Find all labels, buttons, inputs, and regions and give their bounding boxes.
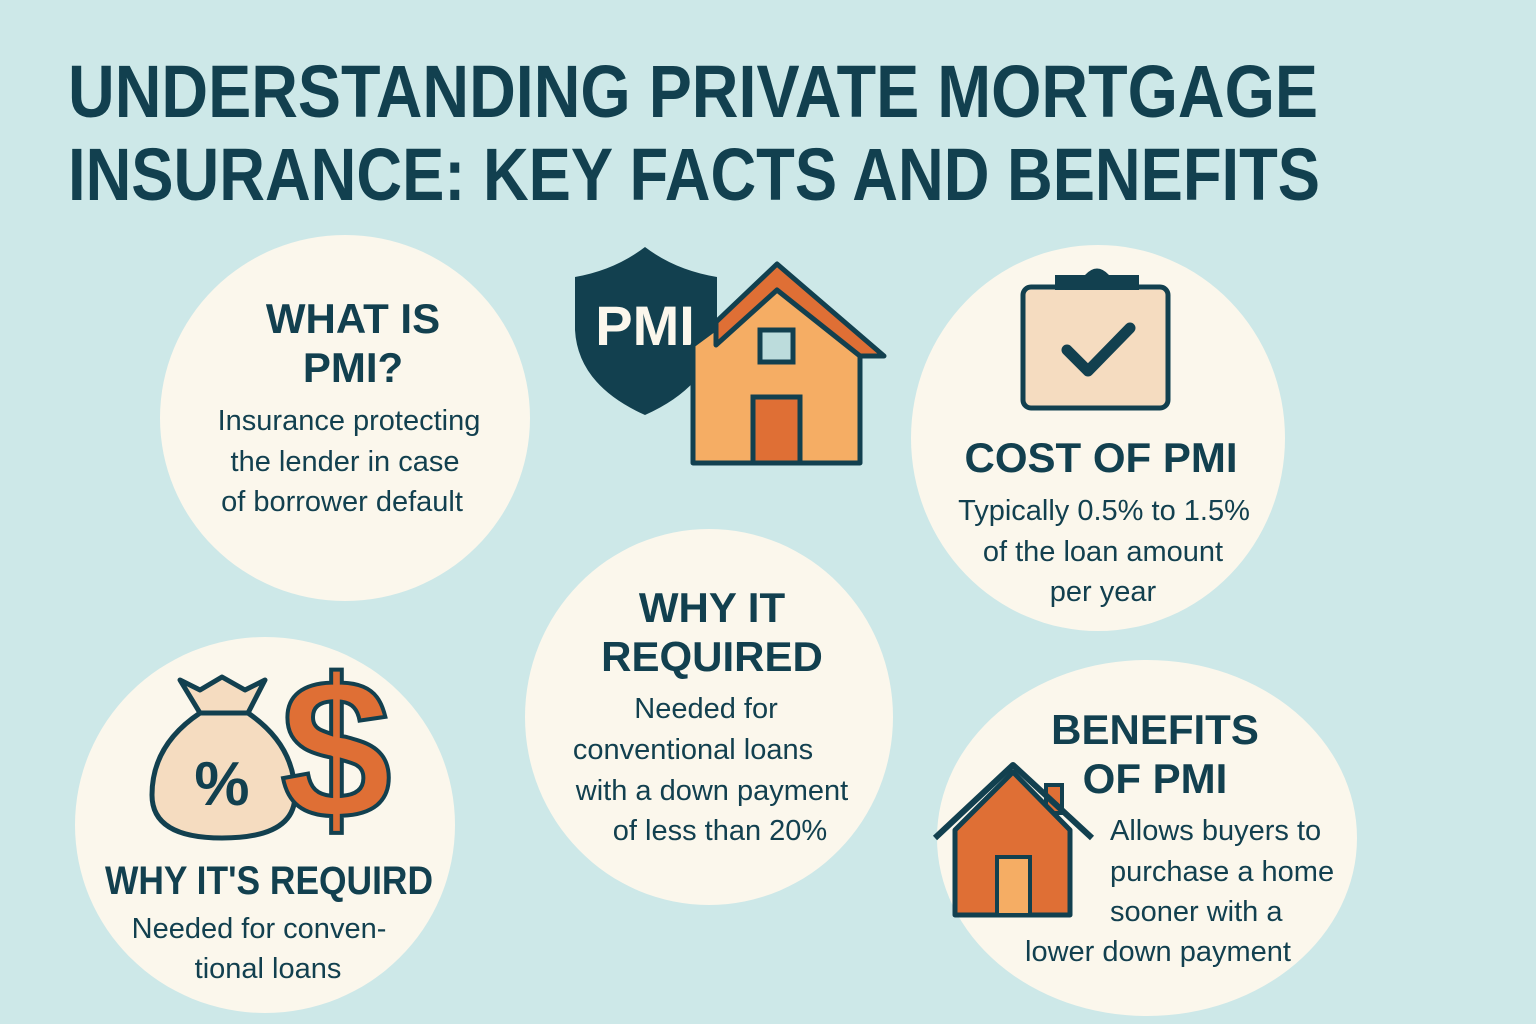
text: middle description bbox=[573, 693, 848, 847]
panel: benefits of PMI bbox=[935, 660, 1357, 1016]
heading: what is PMI: WHAT IS bbox=[266, 295, 440, 342]
text: bottom-left description bbox=[132, 913, 386, 985]
heading: benefits of PMI bbox=[1051, 706, 1259, 802]
text: benefits description bbox=[1025, 815, 1334, 968]
heading: what is PMI: PMI? bbox=[303, 344, 403, 391]
text: benefits description: purchase a home bbox=[1110, 856, 1334, 888]
text: middle description: conventional loans bbox=[573, 734, 813, 766]
text: cost description: of the loan amount bbox=[983, 536, 1223, 568]
heading: cost of PMI: COST OF PMI bbox=[964, 434, 1238, 481]
text: bottom-left description: tional loans bbox=[195, 953, 341, 985]
icon: PMI shield and house: PMI bbox=[595, 294, 695, 357]
text: benefits description: lower down payment bbox=[1025, 936, 1291, 968]
heading: why it required bbox=[601, 584, 823, 680]
icon: money bag and dollar: % bbox=[194, 750, 250, 819]
text: middle description: with a down payment bbox=[575, 775, 848, 807]
heading: what is PMI bbox=[266, 295, 440, 391]
text: cost description: Typically 0.5% to 1.5% bbox=[958, 495, 1250, 527]
panel: cost of PMI bbox=[911, 245, 1285, 631]
title bbox=[68, 50, 1320, 216]
icon: house bbox=[935, 765, 1092, 915]
heading: why it required: REQUIRED bbox=[601, 633, 823, 680]
icon: money bag and dollar: $ bbox=[280, 638, 392, 861]
heading: benefits of PMI: BENEFITS bbox=[1051, 706, 1259, 753]
heading: why it required: WHY IT bbox=[639, 584, 785, 631]
text: benefits description: Allows buyers to bbox=[1110, 815, 1321, 847]
text: middle description: of less than 20% bbox=[613, 815, 827, 847]
title: INSURANCE: KEY FACTS AND BENEFITS bbox=[68, 133, 1320, 216]
text: what is PMI description: Insurance protecting bbox=[218, 405, 480, 437]
panel: why it required (middle) bbox=[525, 529, 893, 905]
icon: PMI shield and house bbox=[575, 247, 884, 463]
heading: benefits of PMI: OF PMI bbox=[1083, 755, 1227, 802]
title: UNDERSTANDING PRIVATE MORTGAGE bbox=[68, 50, 1318, 133]
panel: why it's required (bottom-left) bbox=[75, 637, 455, 1013]
icon: clipboard with check bbox=[1023, 268, 1168, 408]
panel: what is PMI bbox=[160, 235, 530, 601]
text: benefits description: sooner with a bbox=[1110, 896, 1283, 928]
text: what is PMI description: the lender in case bbox=[231, 446, 459, 478]
text: cost description: per year bbox=[1050, 576, 1157, 608]
text: what is PMI description: of borrower default bbox=[221, 486, 463, 518]
text: bottom-left description: Needed for conven- bbox=[132, 913, 386, 945]
icon: money bag and dollar bbox=[152, 638, 392, 861]
text: middle description: Needed for bbox=[634, 693, 778, 725]
heading: why it's requird: WHY IT'S REQUIRD bbox=[105, 859, 433, 903]
text: cost description bbox=[958, 495, 1250, 608]
text: what is PMI description bbox=[218, 405, 480, 518]
